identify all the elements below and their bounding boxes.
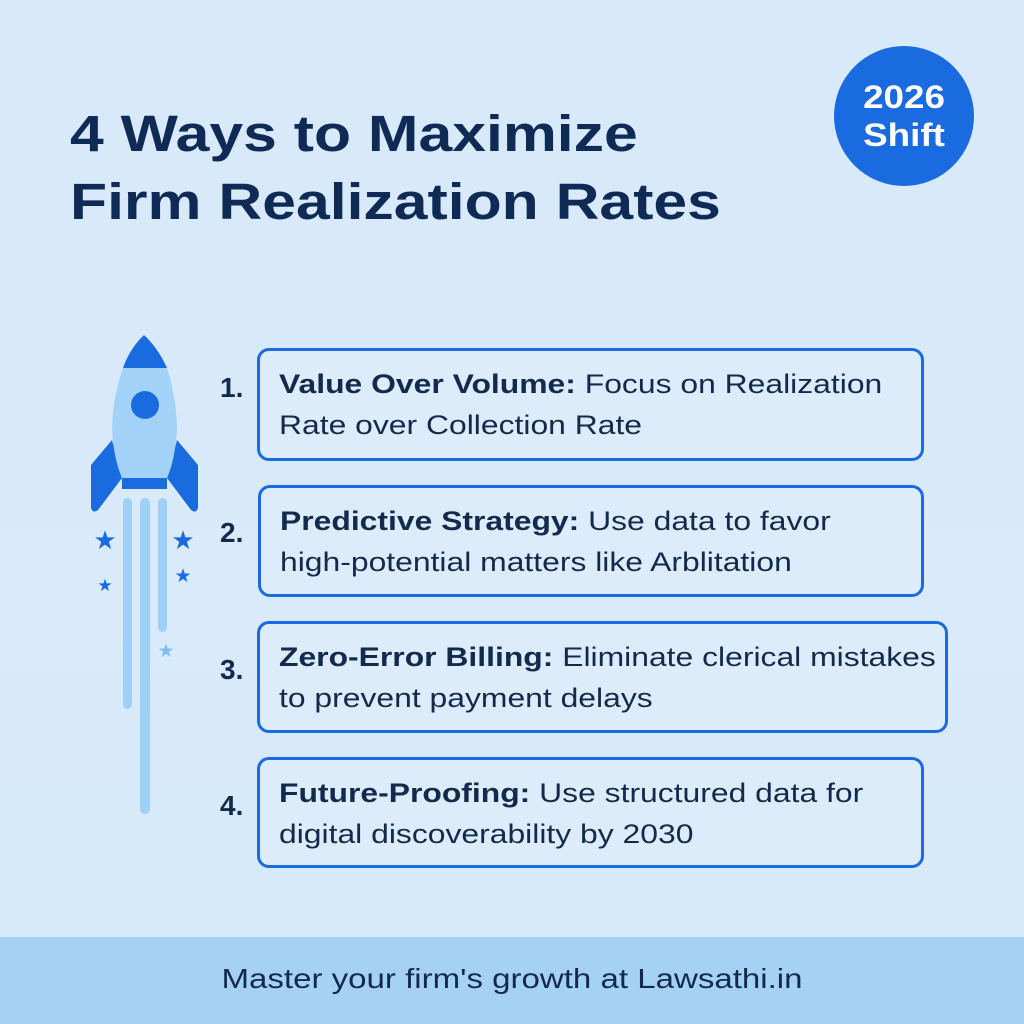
card 2 — [258, 485, 924, 597]
badge: 2026 Shift — [834, 46, 974, 186]
card 1 — [257, 348, 924, 461]
icon: rocket: ★ — [174, 566, 192, 587]
card 3: to prevent payment delays — [279, 683, 653, 713]
card 4: Future-Proofing: Use structured data for — [279, 778, 863, 808]
card 1: Value Over Volume: Focus on Realization — [279, 369, 882, 399]
card 3: Zero-Error Billing: Eliminate clerical mistakes — [279, 642, 936, 672]
item 1 number: 1. — [220, 372, 243, 403]
card 1: Rate over Collection Rate — [279, 410, 642, 440]
card 2: high-potential matters like Arblitation — [280, 547, 792, 577]
footer: Master your firm's growth at Lawsathi.in — [221, 963, 803, 994]
card 2: Predictive Strategy: Use data to favor — [280, 506, 831, 536]
card 4 — [257, 757, 924, 868]
icon: rocket: ★ — [171, 525, 195, 555]
item 2 number: 2. — [220, 517, 243, 548]
card 3 — [257, 621, 948, 733]
icon: rocket: ★ — [93, 525, 117, 555]
icon: rocket — [91, 335, 198, 814]
icon: rocket: ★ — [157, 641, 175, 662]
item 3 number: 3. — [220, 654, 243, 685]
title: Firm Realization Rates — [70, 173, 721, 230]
icon: rocket: ★ — [97, 576, 113, 595]
badge: 2026 Shift: 2026 — [863, 79, 945, 115]
title: 4 Ways to Maximize — [70, 105, 638, 162]
card 4: digital discoverability by 2030 — [279, 819, 693, 849]
footer — [0, 937, 1024, 1024]
item 4 number: 4. — [220, 790, 243, 821]
badge: 2026 Shift: Shift — [863, 117, 945, 153]
title — [70, 105, 721, 230]
